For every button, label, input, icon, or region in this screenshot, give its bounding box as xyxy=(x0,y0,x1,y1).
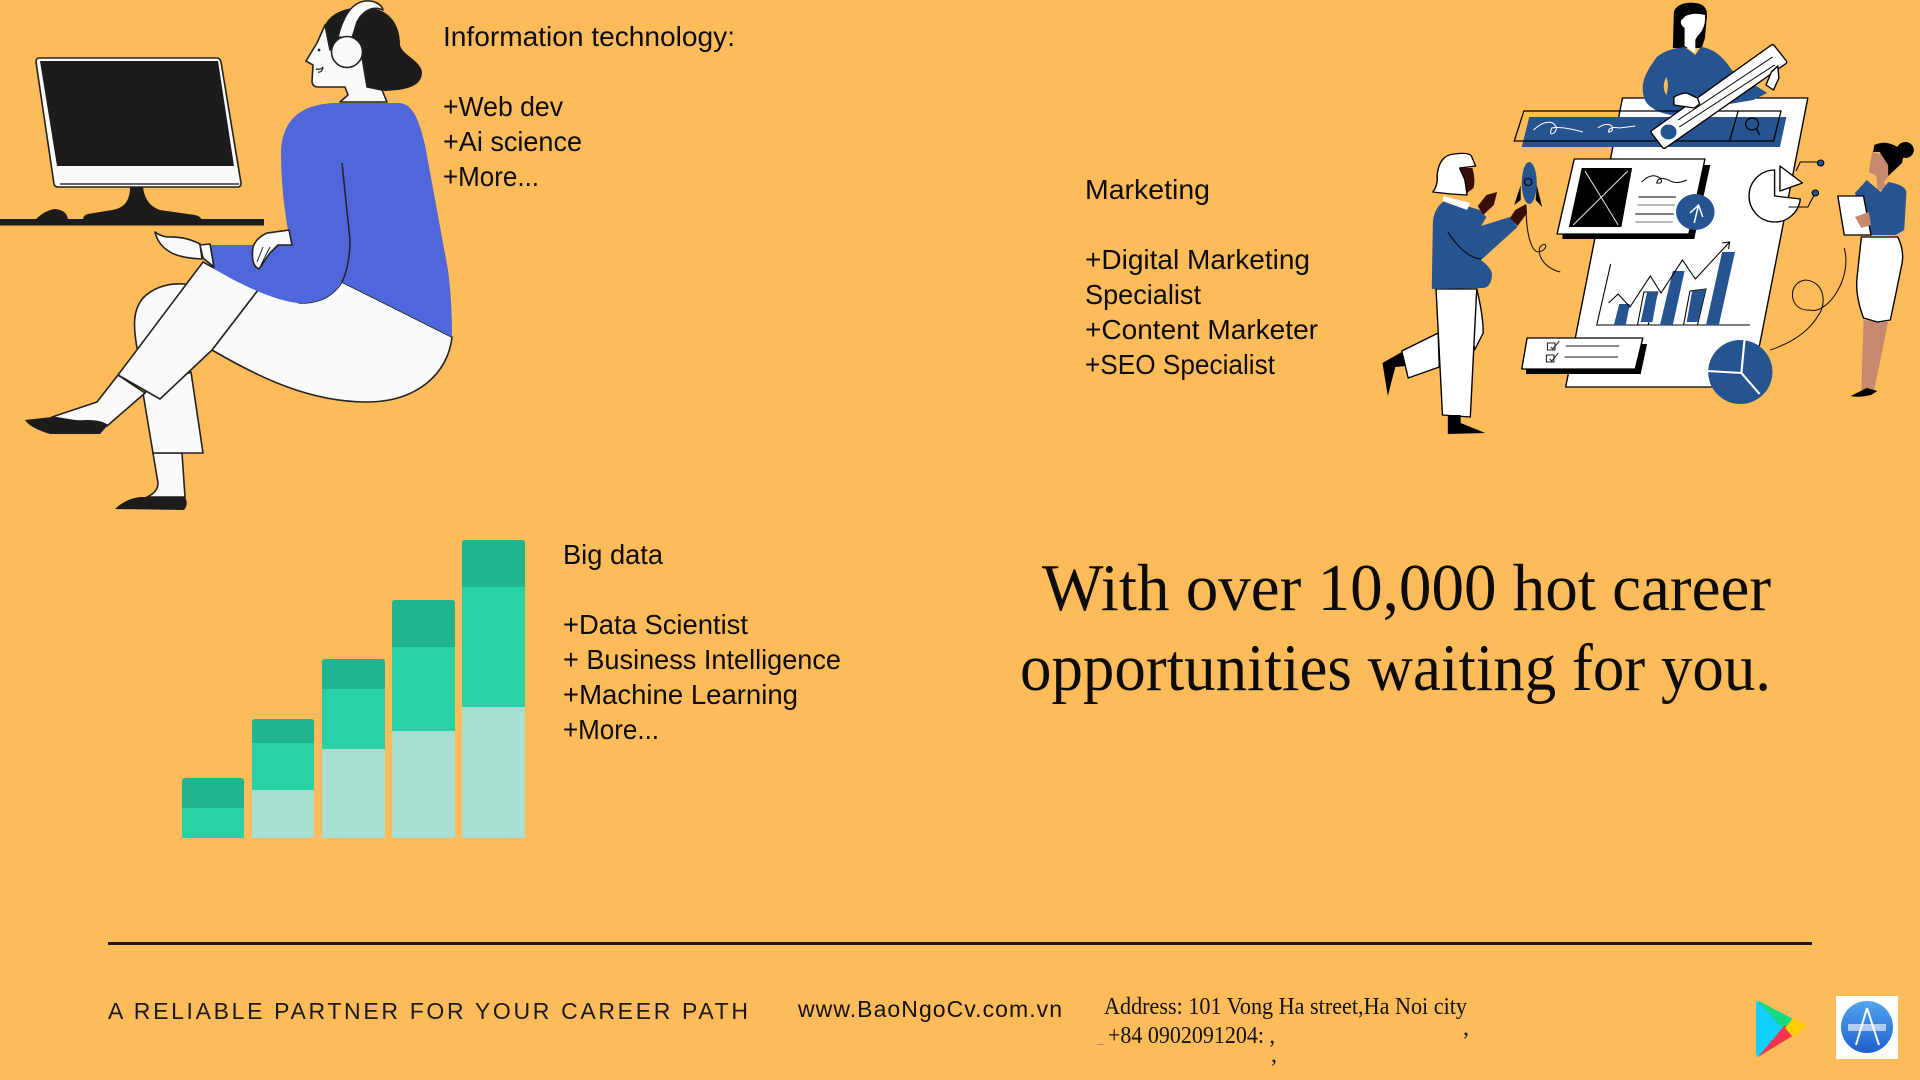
text block: big data: +Data Scientist xyxy=(563,609,748,640)
text block: information technology: +Ai science xyxy=(443,126,582,157)
text block: marketing: Specialist xyxy=(1085,279,1201,310)
text block: marketing: +Content Marketer xyxy=(1085,314,1318,345)
footer address and phone xyxy=(1096,994,1469,1068)
navy pie chart xyxy=(1707,339,1772,404)
bar 2 xyxy=(252,719,314,838)
footer address and phone: Address: 101 Vong Ha street,Ha Noi city xyxy=(1104,994,1467,1020)
bar and line chart xyxy=(1597,242,1750,325)
text block: big data: +Machine Learning xyxy=(563,679,798,710)
text block: information technology: +More... xyxy=(443,161,539,192)
text block: marketing xyxy=(1085,174,1318,380)
heading: career opportunities xyxy=(1020,551,1771,705)
image card with upload button xyxy=(1557,159,1715,239)
illustration: marketing team xyxy=(1382,3,1914,434)
ruler tool xyxy=(1651,45,1787,148)
bar 5 xyxy=(462,540,525,838)
icon: computer monitor on desk xyxy=(0,58,264,226)
back leg and shoe xyxy=(115,284,203,510)
trousers xyxy=(212,282,452,402)
text block: information technology: +Web dev xyxy=(443,91,563,122)
bar 1 xyxy=(182,778,244,838)
text block: big data: +More... xyxy=(563,714,659,745)
text block: marketing: +SEO Specialist xyxy=(1085,349,1275,380)
bar 3 xyxy=(322,659,385,838)
big report board xyxy=(1566,98,1808,387)
woman holding ruler xyxy=(1643,3,1767,115)
front leg and shoe xyxy=(25,262,258,434)
text block: marketing: Marketing xyxy=(1085,174,1210,205)
text block: marketing: +Digital Marketing xyxy=(1085,244,1310,275)
footer address and phone: , xyxy=(1463,1015,1469,1041)
footer website: www.BaoNgoCv.com.vn xyxy=(797,996,1062,1022)
text block: big data xyxy=(563,539,841,745)
stacked bar chart: big data xyxy=(182,540,525,838)
head with hair and headset xyxy=(306,1,422,102)
text block: big data: Big data xyxy=(563,539,663,570)
pie chart outline xyxy=(1749,160,1824,222)
curly decorative lines xyxy=(1526,205,1846,350)
icon: google play xyxy=(1756,1000,1807,1057)
footer address and phone: +84 0902091204: , xyxy=(1108,1023,1275,1049)
footer tagline: A RELIABLE PARTNER FOR YOUR CAREER PATH xyxy=(108,998,748,1024)
text block: information technology: Information technology: xyxy=(443,21,735,52)
text block: information technology xyxy=(443,21,735,192)
checklist card xyxy=(1522,338,1647,374)
icon: app store xyxy=(1836,996,1898,1059)
blue sweater xyxy=(210,103,452,337)
footer address and phone: , xyxy=(1271,1042,1277,1068)
woman with clipboard xyxy=(1838,142,1914,397)
bar 4 xyxy=(392,600,455,838)
footer address and phone: _ xyxy=(1096,1032,1105,1047)
man holding rocket xyxy=(1382,153,1542,434)
heading: career opportunities: opportunities waiting for you. xyxy=(1020,631,1771,705)
illustration: woman with headset at computer xyxy=(0,1,452,510)
text block: big data: + Business Intelligence xyxy=(563,644,841,675)
search bar xyxy=(1514,111,1786,147)
hands xyxy=(155,230,292,269)
heading: career opportunities: With over 10,000 hot career xyxy=(1042,551,1771,625)
